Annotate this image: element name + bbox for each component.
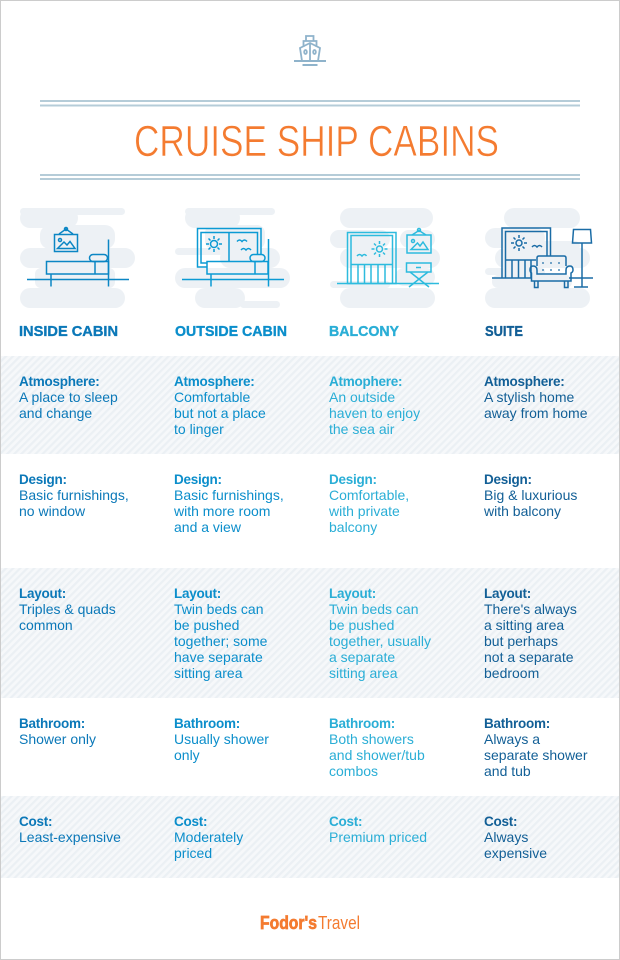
band: layout	[1, 568, 619, 698]
design: outside cabin: and a view	[174, 519, 242, 535]
row: bathroom	[19, 716, 588, 779]
title: CRUISE SHIP CABINS	[134, 117, 499, 166]
row: layout	[19, 586, 577, 681]
row: cost	[19, 814, 547, 861]
layout: suite: a sitting area	[484, 617, 564, 633]
layout: inside cabin: Triples & quads	[19, 601, 116, 617]
layout: outside cabin: together; some	[174, 633, 268, 649]
cost: inside cabin: Least-expensive	[19, 829, 121, 845]
logo: Fodor's Travel: Fodor's	[260, 913, 317, 933]
layout: balcony: Layout:	[329, 586, 376, 601]
layout: outside cabin: be pushed	[174, 617, 239, 633]
bathroom: balcony: combos	[329, 763, 378, 779]
layout: balcony: Twin beds can	[329, 601, 418, 617]
design: outside cabin: Basic furnishings,	[174, 487, 284, 503]
atmosphere: balcony: Atmophere:	[329, 374, 402, 389]
cost: balcony: Cost:	[329, 814, 362, 829]
cost: suite: Cost:	[484, 814, 517, 829]
icon: inside cabin	[20, 208, 135, 308]
cost: outside cabin: Moderately	[174, 829, 243, 845]
header: inside cabin: INSIDE CABIN	[19, 323, 118, 340]
bathroom: outside cabin: Usually shower	[174, 731, 269, 747]
layout: suite: There's always	[484, 601, 577, 617]
design: balcony: balcony	[329, 519, 377, 535]
bathroom: suite: Always a	[484, 731, 540, 747]
layout: suite: Layout:	[484, 586, 531, 601]
icon: outside cabin	[175, 208, 290, 308]
design: inside cabin: Design:	[19, 472, 67, 487]
layout: suite: but perhaps	[484, 633, 558, 649]
design: balcony: Comfortable,	[329, 487, 409, 503]
band: cost	[1, 796, 619, 878]
cost: outside cabin: Cost:	[174, 814, 207, 829]
title rule: top	[40, 100, 580, 106]
bathroom: suite: Bathroom:	[484, 716, 550, 731]
bathroom: outside cabin: Bathroom:	[174, 716, 240, 731]
logo: Fodor's Travel: Travel	[318, 913, 360, 933]
design: outside cabin: Design:	[174, 472, 222, 487]
design: suite: Design:	[484, 472, 532, 487]
bathroom: suite: and tub	[484, 763, 531, 779]
row: design	[19, 472, 577, 535]
design: suite: with balcony	[483, 503, 561, 519]
design: outside cabin: with more room	[173, 503, 270, 519]
header: suite: SUITE	[485, 323, 523, 340]
atmosphere: inside cabin: Atmosphere:	[19, 374, 100, 389]
layout: outside cabin: have separate	[174, 649, 263, 665]
layout: balcony: be pushed	[329, 617, 394, 633]
atmosphere: balcony: the sea air	[329, 421, 395, 437]
layout: outside cabin: sitting area	[174, 665, 243, 681]
bathroom: suite: separate shower	[484, 747, 588, 763]
layout: balcony: a separate	[329, 649, 395, 665]
icon: cruise ship	[294, 36, 326, 65]
layout: outside cabin: Layout:	[174, 586, 221, 601]
icon: suite	[485, 208, 593, 308]
icon: balcony	[330, 208, 440, 308]
bathroom: balcony: Bathroom:	[329, 716, 395, 731]
title rule: bottom	[40, 174, 580, 180]
cost: suite: expensive	[484, 845, 547, 861]
logo: Fodor's Travel	[260, 913, 360, 933]
header: balcony: BALCONY	[329, 323, 399, 340]
header: outside cabin: OUTSIDE CABIN	[175, 323, 287, 340]
design: inside cabin: no window	[19, 503, 86, 519]
cost: outside cabin: priced	[174, 845, 212, 861]
atmosphere: outside cabin: to linger	[174, 421, 224, 437]
bathroom: outside cabin: only	[174, 747, 200, 763]
layout: outside cabin: Twin beds can	[174, 601, 264, 617]
layout: balcony: together, usually	[329, 633, 431, 649]
layout: inside cabin: Layout:	[19, 586, 66, 601]
design: balcony: Design:	[329, 472, 377, 487]
bathroom: balcony: Both showers	[329, 731, 414, 747]
band: atmosphere	[1, 356, 619, 454]
layout: suite: bedroom	[484, 665, 539, 681]
atmosphere: balcony: haven to enjoy	[329, 405, 420, 421]
bathroom: inside cabin: Shower only	[19, 731, 96, 747]
bathroom: inside cabin: Bathroom:	[19, 716, 85, 731]
row: atmosphere	[19, 374, 588, 437]
column headers	[19, 323, 523, 340]
cost: suite: Always	[484, 829, 528, 845]
cost: inside cabin: Cost:	[19, 814, 52, 829]
cost: balcony: Premium priced	[329, 829, 427, 845]
bathroom: balcony: and shower/tub	[329, 747, 425, 763]
layout: inside cabin: common	[19, 617, 73, 633]
design: suite: Big & luxurious	[484, 487, 577, 503]
atmosphere: suite: away from home	[484, 405, 588, 421]
atmosphere: suite: Atmosphere:	[484, 374, 565, 389]
layout: suite: not a separate	[484, 649, 574, 665]
design: balcony: with private	[328, 503, 400, 519]
atmosphere: outside cabin: Atmosphere:	[174, 374, 255, 389]
atmosphere: inside cabin: A place to sleep	[19, 389, 118, 405]
design: inside cabin: Basic furnishings,	[19, 487, 129, 503]
atmosphere: balcony: An outside	[329, 389, 395, 405]
atmosphere: inside cabin: and change	[19, 405, 92, 421]
atmosphere: outside cabin: Comfortable	[174, 389, 250, 405]
atmosphere: suite: A stylish home	[484, 389, 574, 405]
atmosphere: outside cabin: but not a place	[174, 405, 266, 421]
layout: balcony: sitting area	[329, 665, 398, 681]
